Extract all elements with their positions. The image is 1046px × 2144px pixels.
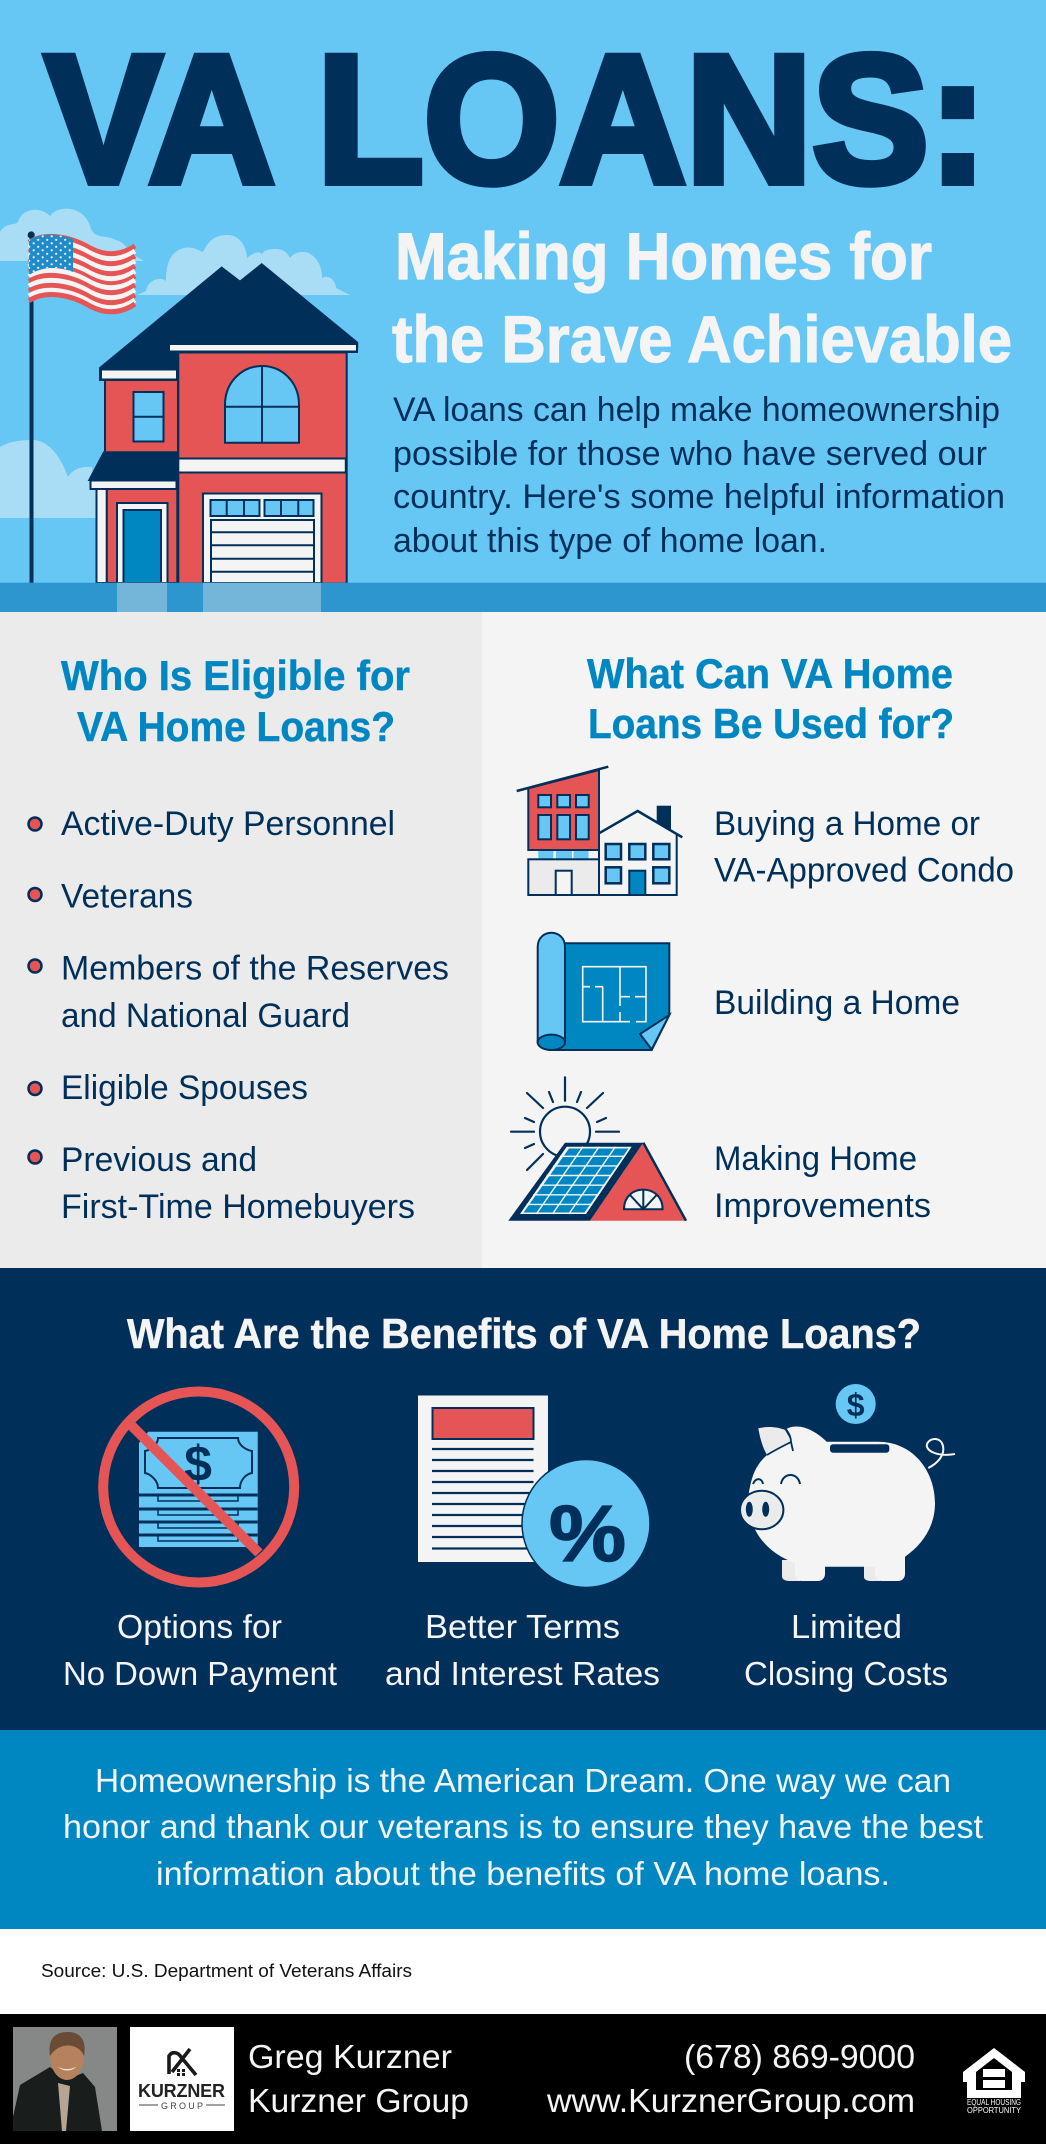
icon: piggy bank: $: [847, 1387, 865, 1423]
icon: piggy bank: [740, 1384, 955, 1581]
label: improvements: Improvements: [714, 1187, 931, 1225]
panel: closing message: information about the benefits of VA home loans.: [156, 1855, 890, 1892]
money stack: [139, 1432, 258, 1547]
icon: blueprint: [538, 933, 669, 1050]
heading: uses: What Can VA Home: [587, 650, 953, 697]
panel: what can loans be used for: [482, 612, 1046, 1268]
icon: house: [89, 264, 357, 584]
left upper wing: [105, 380, 178, 453]
panel: who is eligible: [0, 612, 482, 1268]
caption: better terms: and Interest Rates: [385, 1655, 660, 1692]
icon: document with percent: [418, 1396, 650, 1588]
caption: no down payment: [63, 1608, 337, 1692]
bullet list: First-Time Homebuyers: [61, 1188, 415, 1226]
main wall: [178, 352, 347, 584]
money stack: $: [184, 1436, 212, 1492]
agent name: Kurzner Group: [248, 2082, 469, 2119]
label: buying: [714, 805, 1014, 890]
source note: [0, 1929, 1046, 2014]
panel: footer: [0, 2014, 1046, 2144]
label: buying: Buying a Home or: [714, 805, 980, 843]
contact details: (678) 869-9000: [684, 2038, 915, 2075]
porch: [89, 452, 177, 480]
source note: Source: U.S. Department of Veterans Affairs: [41, 1961, 412, 1981]
bullet list: and National Guard: [61, 997, 350, 1035]
icon: equal housing: [963, 2048, 1025, 2115]
roof: [100, 264, 357, 380]
intro text: about this type of home loan.: [393, 522, 827, 560]
panel: closing message: Homeownership is the American Dream. One way we can: [95, 1762, 951, 1799]
agent name: [248, 2038, 469, 2119]
icon: document with percent: %: [549, 1489, 626, 1578]
contact details: [546, 2038, 915, 2119]
bullet list: Veterans: [61, 878, 193, 916]
icon: solar roof: [508, 1077, 686, 1221]
label: buying: VA-Approved Condo: [714, 852, 1014, 890]
bullet list: Previous and: [61, 1141, 257, 1179]
caption: closing costs: Closing Costs: [744, 1655, 948, 1692]
garage: [203, 494, 322, 583]
icon: equal housing: EQUAL HOUSING: [967, 2098, 1021, 2107]
caption: better terms: [385, 1608, 660, 1692]
panel: hero header: [0, 0, 1046, 612]
door: [117, 503, 168, 583]
small window: [134, 392, 164, 442]
upper fascia: [169, 344, 357, 352]
caption: no down payment: No Down Payment: [63, 1655, 337, 1692]
label: improvements: Making Home: [714, 1140, 917, 1178]
arched window: [225, 366, 299, 443]
heading: eligibility: VA Home Loans?: [77, 703, 395, 750]
icon: no down payment: [103, 1392, 294, 1582]
intro text: country. Here's some helpful information: [393, 478, 1005, 516]
company logo: KURZNER: [138, 2081, 225, 2101]
intro text: VA loans can help make homeownership: [393, 391, 1000, 429]
agent photo: [13, 2027, 117, 2131]
panel: closing message: honor and thank our veterans is to ensure they have the best: [63, 1808, 983, 1845]
heading: uses: Loans Be Used for?: [588, 700, 954, 747]
contact details: www.KurznerGroup.com: [546, 2082, 915, 2119]
icon: buildings: [517, 767, 682, 895]
subtitle: the Brave Achievable: [392, 302, 1012, 376]
intro text: possible for those who have served our: [393, 435, 987, 473]
icon: clouds: [0, 209, 350, 518]
subtitle: [392, 219, 1012, 376]
ground band: [0, 583, 1046, 612]
heading: benefits: What Are the Benefits of VA Home Loans?: [127, 1310, 921, 1357]
heading: uses: [587, 650, 954, 747]
heading: eligibility: Who Is Eligible for: [61, 652, 410, 699]
bullet list: Eligible Spouses: [61, 1069, 308, 1107]
bullet list: [28, 805, 449, 1226]
label: building: Building a Home: [714, 984, 960, 1022]
panel: closing message: [0, 1730, 1046, 1929]
prohibition sign: [103, 1392, 294, 1582]
title: VA LOANS:: [45, 17, 987, 221]
caption: closing costs: Limited: [791, 1608, 902, 1645]
caption: closing costs: [744, 1608, 948, 1692]
white band: [178, 458, 346, 472]
label: improvements: [714, 1140, 931, 1225]
caption: no down payment: Options for: [117, 1608, 282, 1645]
heading: eligibility: [61, 652, 410, 750]
bullet list: Active-Duty Personnel: [61, 805, 395, 843]
icon: equal housing: OPPORTUNITY: [967, 2106, 1022, 2115]
subtitle: Making Homes for: [395, 219, 932, 293]
caption: better terms: Better Terms: [425, 1608, 620, 1645]
intro text: [393, 391, 1005, 560]
company logo: GROUP: [161, 2101, 203, 2111]
icon: flag and pole: [28, 231, 135, 583]
bullet list: Members of the Reserves: [61, 950, 449, 988]
agent name: Greg Kurzner: [248, 2038, 452, 2075]
company logo: [130, 2027, 234, 2131]
panel: benefits: [0, 1268, 1046, 1730]
